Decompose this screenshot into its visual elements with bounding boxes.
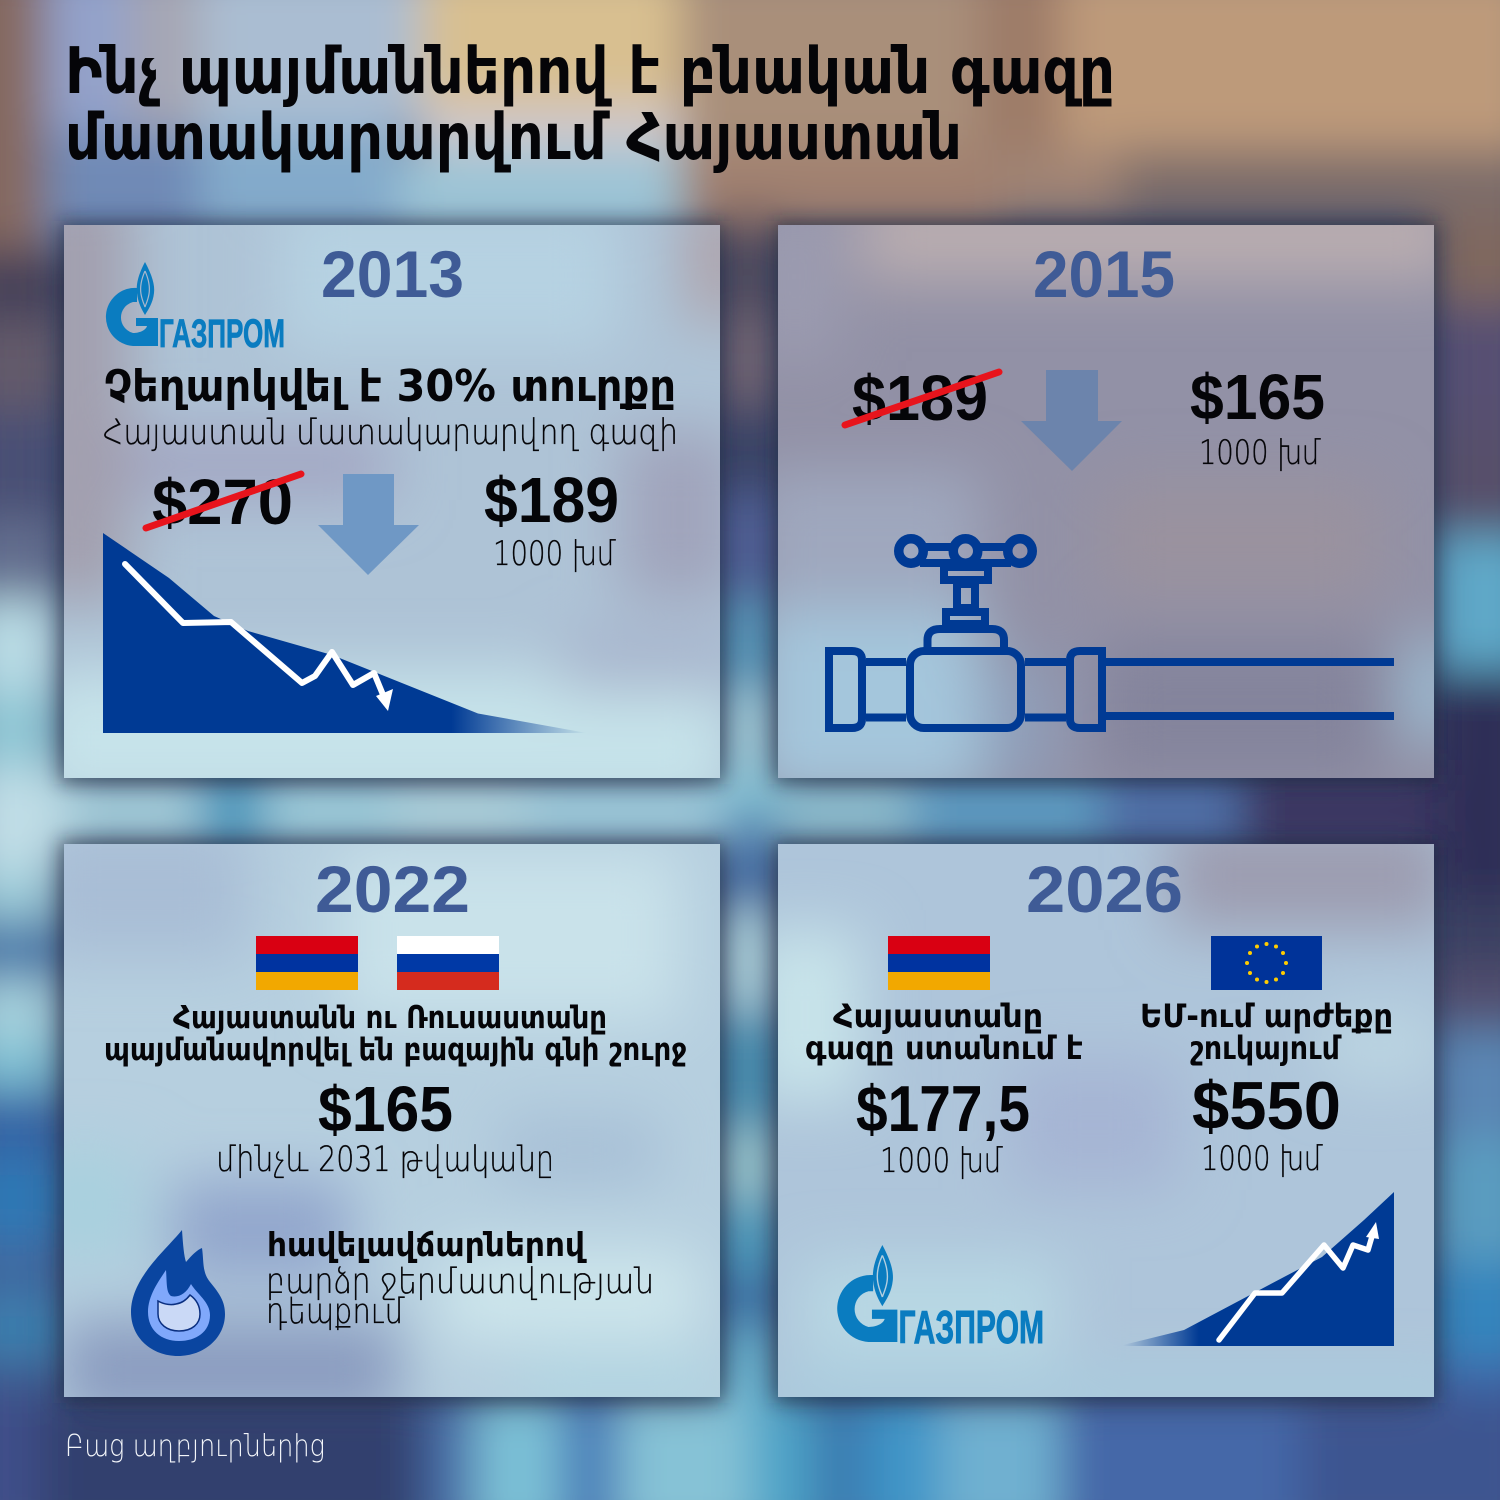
text: Armenia receives gas: գազը ստանում է (805, 1029, 1083, 1067)
old price $189: $189 (852, 362, 988, 434)
subheading: Հայաստան մատակարարվող գազի (103, 413, 678, 453)
text: EU market price: շուկայում (1190, 1029, 1342, 1067)
price $550: $550 (1192, 1068, 1341, 1144)
text: surcharges: հավելավճարներով (267, 1225, 588, 1264)
new price $189: $189 (484, 464, 619, 536)
panel: 2026 (778, 844, 1434, 1397)
flag: Armenia (888, 936, 990, 990)
chart: rising area (1123, 1192, 1394, 1346)
unit: 1000 խմ (1199, 433, 1321, 473)
year 2022: 2022 (315, 852, 470, 926)
heading: duty cancelled: Չեղարկվել է 30% տուրքը (104, 361, 676, 412)
text: EU market price (1140, 997, 1393, 1067)
text: agreement (104, 1000, 687, 1068)
flag: Armenia (256, 936, 358, 990)
title: մատակարարվում Հայաստան (65, 101, 962, 175)
icon: gas flame (131, 1230, 225, 1356)
text: EU market price: ԵՄ-ում արժեքը (1140, 997, 1393, 1035)
panel: 2015 (778, 225, 1434, 778)
old price $270: $270 (152, 466, 293, 538)
arrow: down (1021, 370, 1122, 471)
year 2015: 2015 (1033, 237, 1175, 311)
price $177,5: $177,5 (856, 1072, 1030, 1145)
text: agreement: պայմանավորվել են բազային գնի շուրջ (104, 1032, 687, 1068)
title: Ինչ պայմաններով է բնական գազը (65, 35, 1115, 109)
text: surcharges: դեպքում (266, 1292, 405, 1332)
unit: 1000 խմ (493, 534, 616, 574)
source note: Բաց աղբյուրներից (65, 1429, 325, 1464)
year 2013: 2013 (321, 237, 464, 311)
logo: Gazprom (837, 1245, 1044, 1353)
title (65, 35, 1115, 175)
icon: gas pipeline valve (829, 539, 1394, 728)
unit: 1000 խմ (1201, 1139, 1323, 1179)
price $165: $165 (318, 1073, 453, 1145)
text: Armenia receives gas: Հայաստանը (833, 997, 1043, 1035)
text: surcharges (266, 1225, 654, 1332)
text: agreement: Հայաստանն ու Ռուսաստանը (173, 1000, 607, 1036)
logo: Gazprom: ГАЗПРОМ (899, 1301, 1044, 1353)
arrow: down (318, 474, 419, 575)
flag: European Union (1211, 936, 1322, 990)
flag: Russia (397, 936, 499, 990)
panel: 2013 (64, 225, 720, 778)
text: Armenia receives gas (805, 997, 1083, 1067)
text: surcharges: բարձր ջերմատվության (266, 1262, 654, 1302)
year 2026: 2026 (1026, 852, 1183, 926)
text: until 2031: մինչև 2031 թվականը (216, 1140, 554, 1180)
unit: 1000 խմ (880, 1141, 1003, 1181)
new price $165: $165 (1190, 361, 1325, 433)
panel: 2022 (64, 844, 720, 1397)
chart: falling area (103, 533, 587, 733)
logo: Gazprom: ГАЗПРОМ (159, 312, 285, 356)
logo: Gazprom (106, 262, 285, 356)
